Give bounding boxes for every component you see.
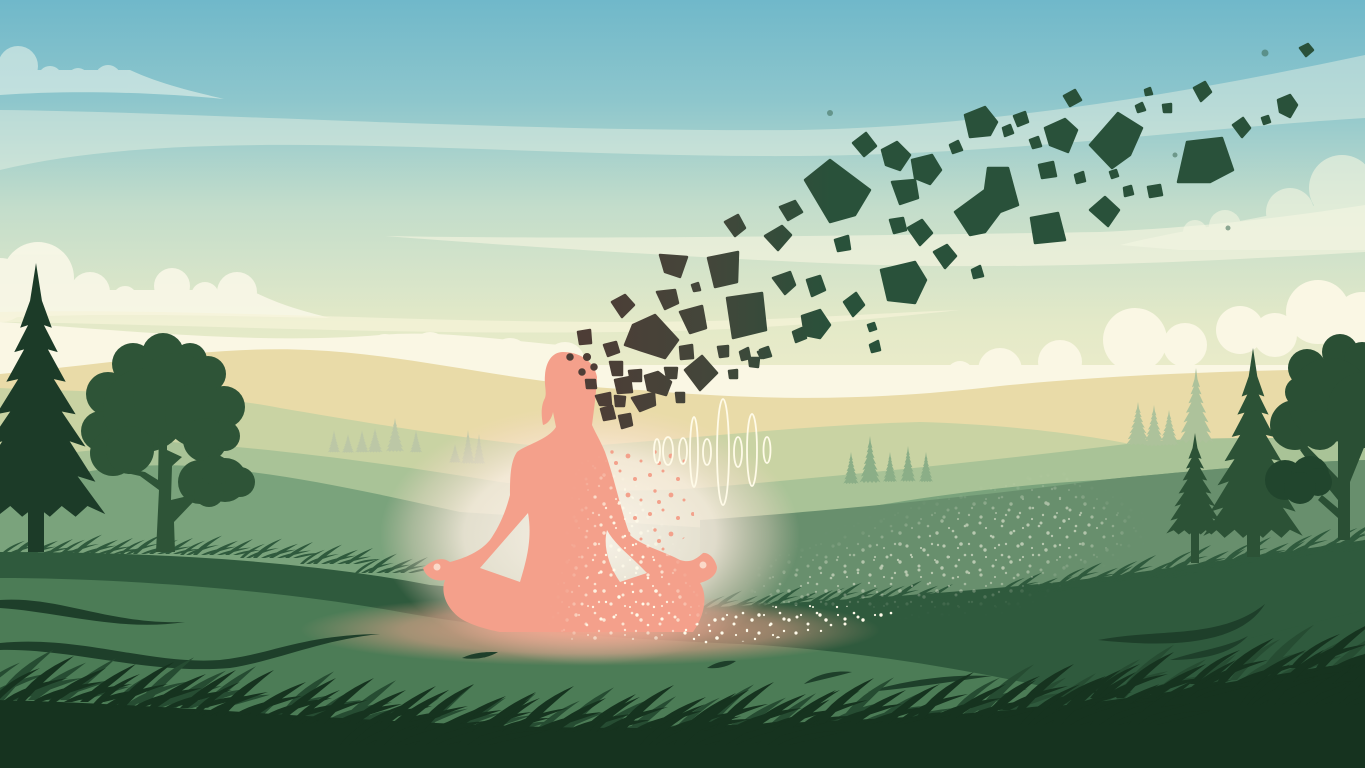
dark meadow band — [0, 522, 1365, 768]
green meadow hills — [0, 460, 1365, 640]
left round tree — [81, 333, 255, 552]
clouds and wisps — [0, 46, 1365, 420]
mid grass row — [0, 625, 1365, 738]
foreground grass swooshes — [0, 600, 1265, 692]
floating rock fragments — [568, 44, 1313, 428]
glow around figure — [280, 400, 900, 670]
foreground dark grass — [0, 622, 1365, 768]
faint sky specks — [827, 50, 1268, 230]
lower meadow — [0, 578, 1060, 768]
meditating figure — [423, 352, 717, 632]
distant pine trees — [328, 368, 1214, 484]
right round tree — [1265, 334, 1365, 540]
left pine tree — [0, 263, 105, 552]
foreground dark meadow on right — [1040, 610, 1365, 768]
distant hills — [0, 349, 1365, 580]
right pine trees — [1166, 348, 1303, 563]
particle trail over the meadow — [683, 484, 1129, 644]
sound wave rings — [654, 399, 770, 505]
dissolving particles on body — [561, 450, 700, 640]
